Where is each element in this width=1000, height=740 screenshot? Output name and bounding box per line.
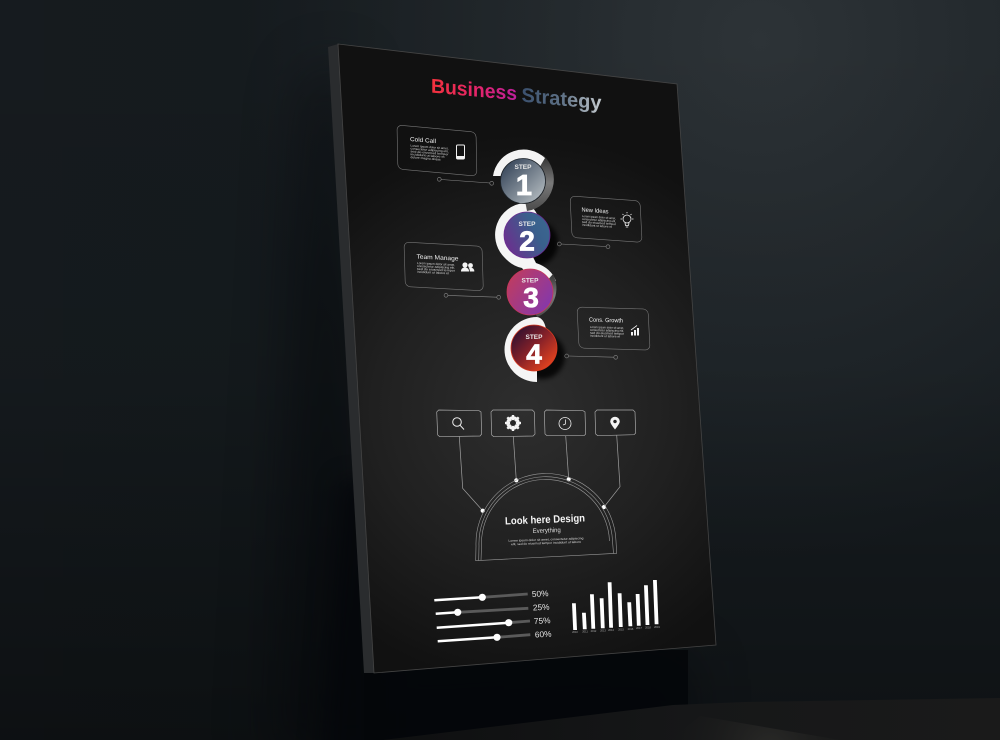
step 1 badge: STEP <box>515 164 532 171</box>
step ribbons <box>493 149 565 382</box>
ribbon 1 white <box>493 149 545 181</box>
step 1 badge <box>500 158 546 204</box>
panel: Cons. Growth <box>577 307 650 350</box>
body text: sed do eiusmod tempor <box>582 220 616 226</box>
icon: people <box>461 262 474 272</box>
icon: light bulb <box>620 212 634 227</box>
body text <box>590 325 624 339</box>
step 2 badge <box>504 212 550 258</box>
arch body text <box>508 536 584 546</box>
connector lines to arch <box>459 435 620 511</box>
ribbon 3 grey <box>530 274 556 317</box>
arch body text: elit, sed do eiusmod tempor incididunt ut labore <box>511 540 581 546</box>
arch body text: Lorem ipsum dolor sit amet, consectetur adipiscing <box>508 536 584 543</box>
icon tile: settings <box>491 410 535 437</box>
body text: sed do eiusmod tempor <box>590 331 624 336</box>
panel: New Ideas <box>570 196 642 242</box>
ribbon 4 white <box>504 317 546 382</box>
body text: Lorem ipsum dolor sit amet, <box>590 325 624 330</box>
title <box>431 76 602 115</box>
body text: consectetur adipiscing elit, <box>590 328 624 333</box>
icon tile: search <box>437 410 482 437</box>
slider 60%: 60% <box>535 629 552 639</box>
title word: Business: Business <box>431 76 517 105</box>
year labels: 2019 <box>654 625 660 629</box>
slider 75%: 75% <box>534 615 551 626</box>
step 1 badge: 1 <box>516 170 532 202</box>
poster board <box>328 44 716 673</box>
step 4 badge: 4 <box>526 338 542 370</box>
body text: incididunt ut labore et <box>590 334 620 339</box>
step 3 badge: STEP <box>522 278 539 284</box>
floor <box>383 698 1000 740</box>
year labels: 2010 <box>572 630 578 634</box>
body text: consectetur adipiscing elit, <box>582 217 616 223</box>
step 3 badge <box>507 269 553 315</box>
body text: dolore magna aliqua <box>410 155 441 162</box>
year labels: 2013 <box>600 628 606 632</box>
slider 50%: 50% <box>532 588 549 599</box>
connector: Cold Call <box>437 177 494 185</box>
year labels: 2011 <box>582 630 588 634</box>
year labels: 2016 <box>628 627 634 631</box>
ribbon 2 white <box>495 203 556 281</box>
step 2 badge: STEP <box>519 221 536 228</box>
body text: sed do eiusmod tempor <box>410 149 449 156</box>
arch panel <box>476 473 617 561</box>
panel: Cold Call <box>397 125 477 176</box>
sliders <box>434 588 552 641</box>
body text: consectetur adipiscing elit, <box>410 146 449 153</box>
body text: Lorem ipsum dolor sit amet, <box>582 214 616 220</box>
body text: consectetur adipiscing elit, <box>417 264 455 270</box>
body text <box>582 214 616 229</box>
year labels: 2017 <box>636 626 642 630</box>
icon tile: location <box>595 410 636 436</box>
heading: Team Manage: Team Manage <box>416 254 459 263</box>
body text: Lorem ipsum dolor sit amet, <box>410 144 449 151</box>
step 3 badge: 3 <box>523 282 539 313</box>
step 4 badge <box>511 325 557 371</box>
heading: Cons. Growth: Cons. Growth <box>589 318 623 325</box>
arch heading: Look here Design <box>505 512 585 528</box>
body text <box>417 261 455 276</box>
ribbon 1 grey <box>523 155 554 211</box>
slider 25%: 25% <box>533 602 550 612</box>
icon tile: clock <box>544 410 586 436</box>
year labels: 2015 <box>618 628 624 632</box>
step 2 badge: 2 <box>519 226 535 256</box>
body text: sed do eiusmod tempor <box>417 267 455 273</box>
connector: New Ideas <box>557 242 610 249</box>
ribbon shadow <box>512 220 565 379</box>
year labels <box>572 625 660 634</box>
title word: Strategy: Strategy <box>522 85 602 115</box>
body text: incididunt ut labore et <box>582 223 612 229</box>
year labels: 2018 <box>645 626 651 630</box>
poster side edge <box>328 44 374 673</box>
panel: Team Manage <box>404 242 483 291</box>
arch dots <box>481 477 606 513</box>
body text: incididunt ut labore et <box>417 270 449 275</box>
step 4 badge: STEP <box>526 334 543 341</box>
icon: phone <box>456 145 464 159</box>
year labels: 2014 <box>608 628 614 632</box>
icon: growth chart <box>631 326 639 336</box>
heading: New Ideas: New Ideas <box>582 208 608 215</box>
heading: Cold Call: Cold Call <box>410 137 436 145</box>
connector: Team Manage <box>444 293 501 299</box>
body text: Lorem ipsum dolor sit amet, <box>417 261 455 267</box>
arch outlines <box>476 473 617 561</box>
year labels: 2012 <box>591 629 597 633</box>
body text: incididunt ut labore et <box>410 152 445 159</box>
arch subheading: Everything <box>533 527 561 535</box>
body text <box>410 144 449 162</box>
bars <box>572 580 658 630</box>
poster face <box>338 44 716 673</box>
connector: Cons. Growth <box>565 354 618 359</box>
bar chart <box>572 580 660 634</box>
